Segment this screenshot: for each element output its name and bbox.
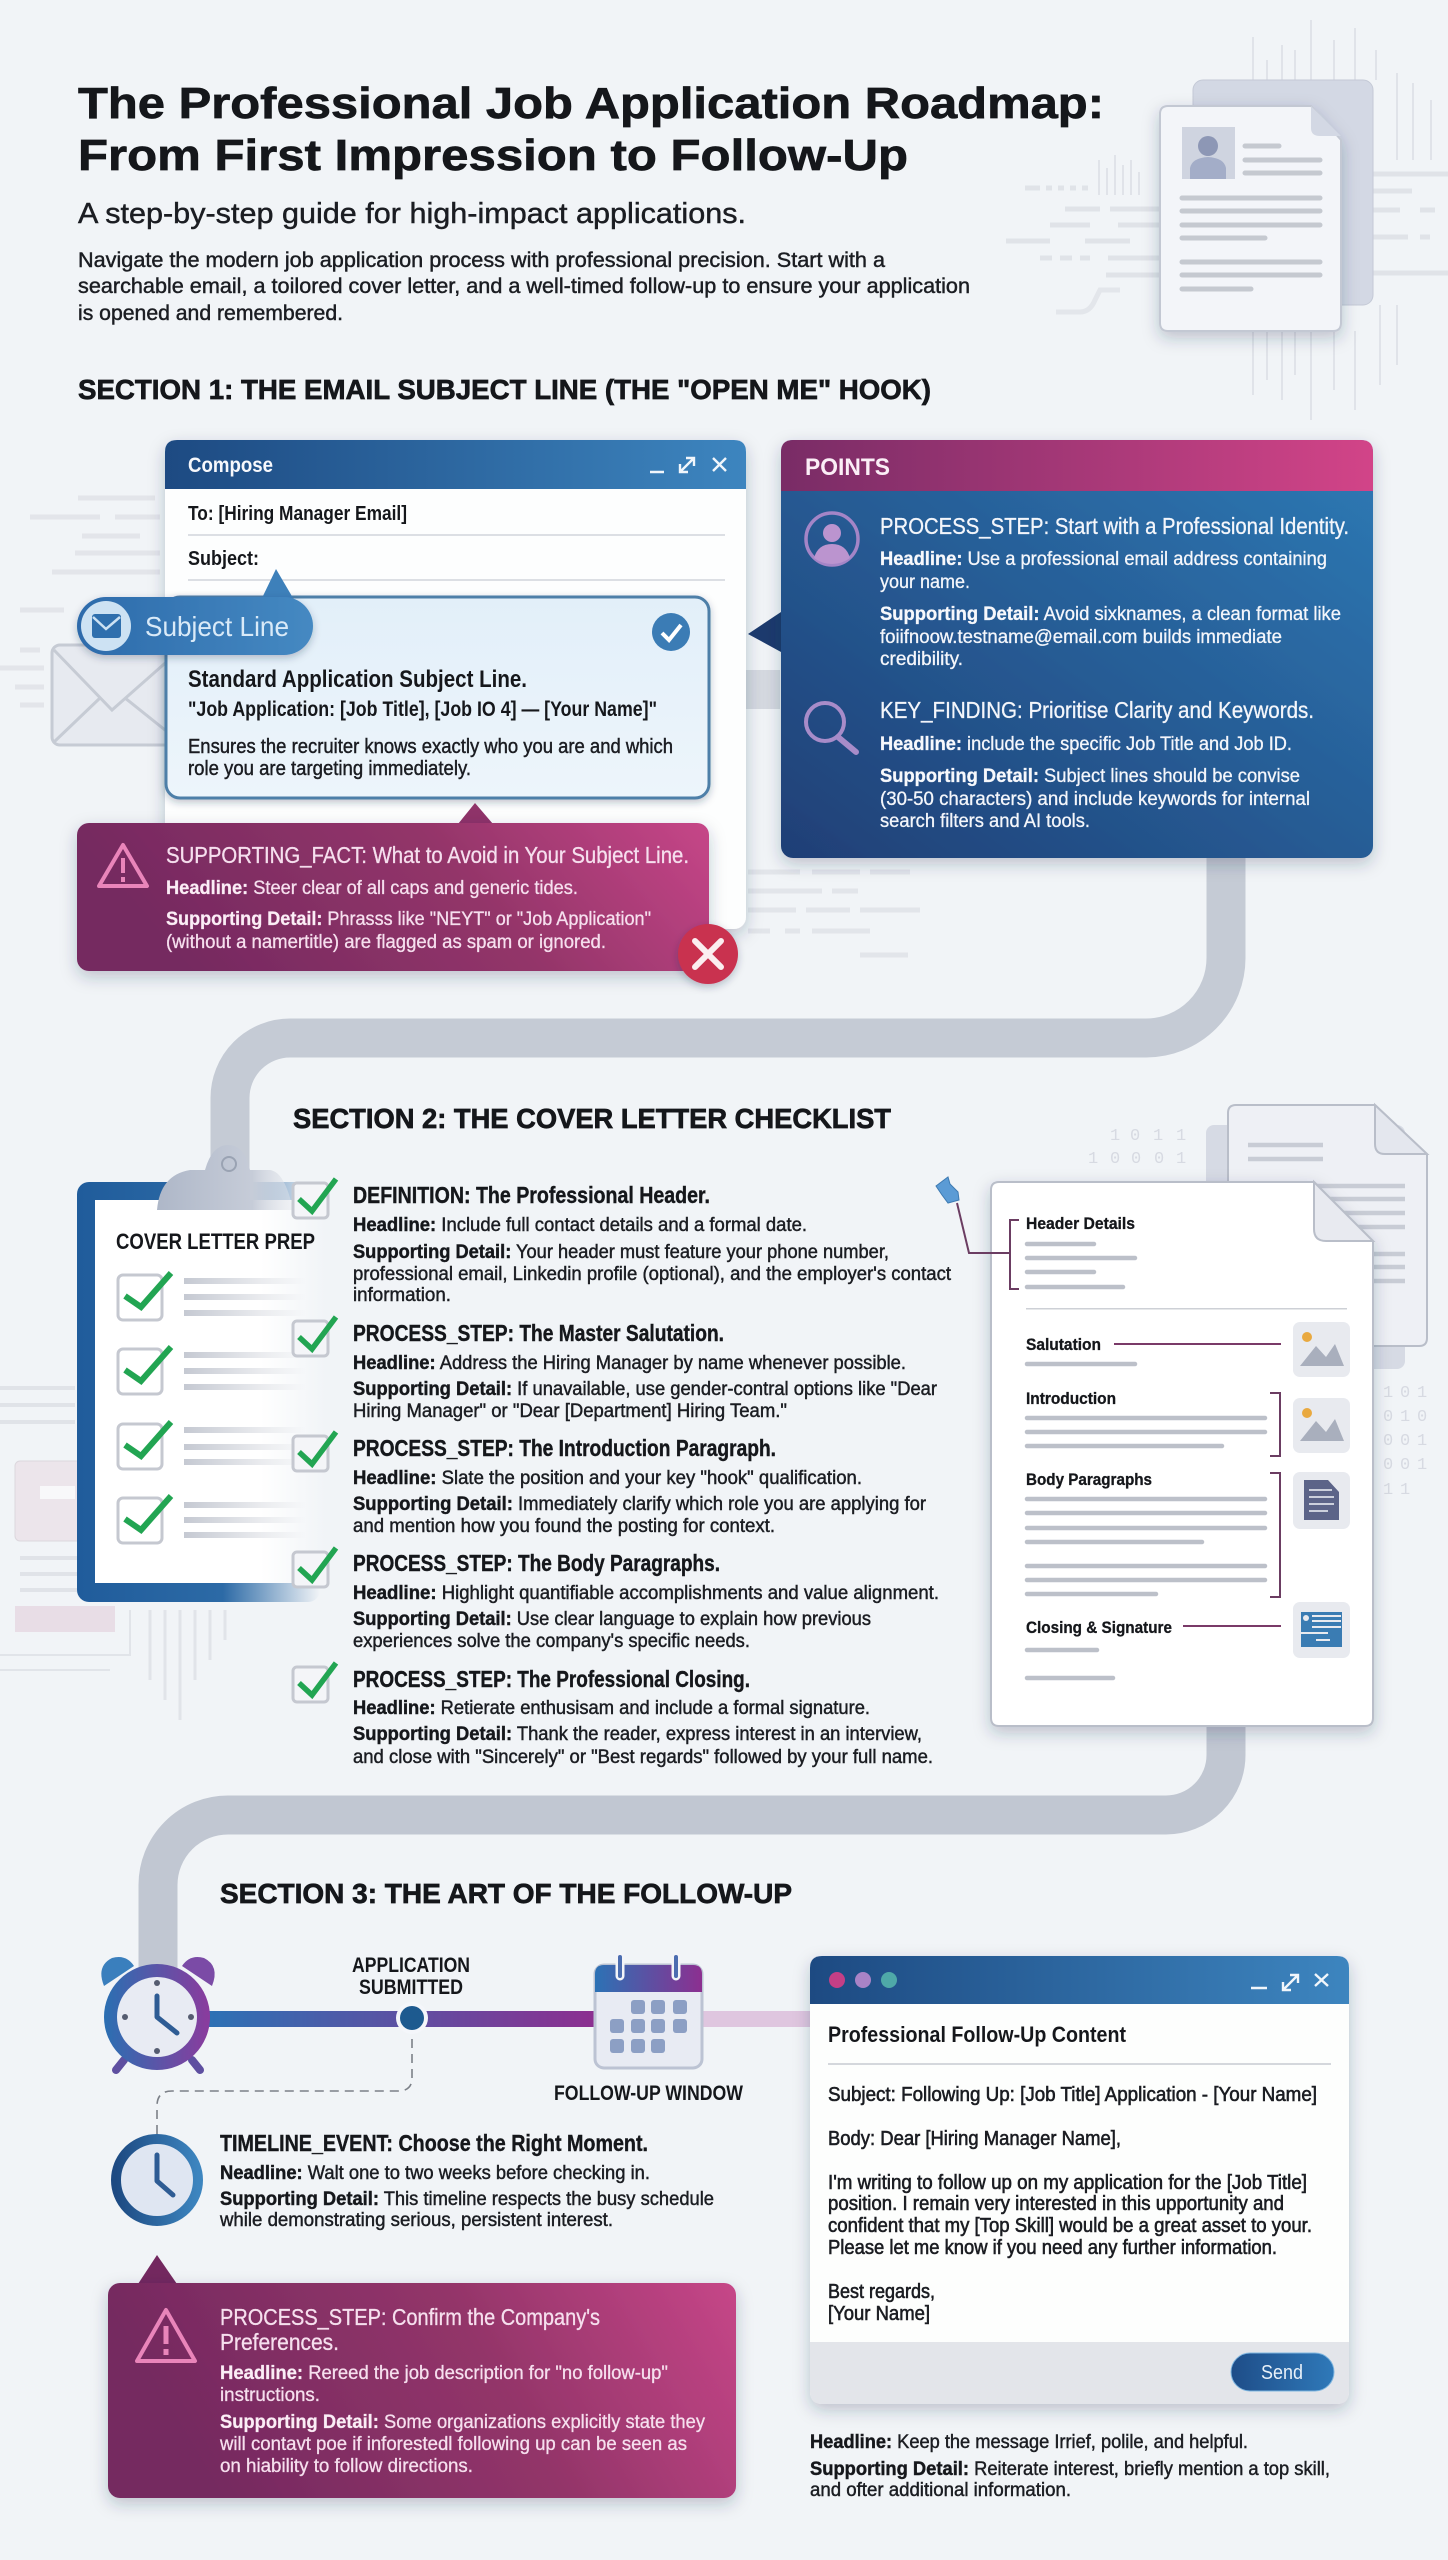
subject template: "Job Application: [Job Title], [Job IO 4] — [Your Name]" <box>188 698 657 721</box>
text block: email guidance: Headline: Keep the message Irrief, polile, and helpful. <box>810 2432 1248 2453</box>
decoration: binary digits: 0 <box>1110 1150 1120 1169</box>
checklist: introduction paragraph: and mention how you found the posting for context. <box>353 1516 775 1537</box>
email heading: Professional Follow-Up Content <box>828 2022 1127 2047</box>
decoration: binary digits: 0 <box>1417 1408 1427 1427</box>
checklist: body paragraphs: experiences solve the company's specific needs. <box>353 1631 750 1652</box>
avoid text <box>166 842 689 953</box>
text block: timeline event: TIMELINE_EVENT: Choose the Right Moment. <box>220 2130 648 2156</box>
icon: envelope <box>81 601 131 651</box>
icon: document tile <box>1293 1472 1350 1529</box>
points label: POINTS <box>805 454 890 481</box>
checklist: introduction paragraph: Headline: Slate the position and your key "hook" qualification. <box>353 1468 862 1489</box>
email sign-off <box>828 2281 935 2325</box>
checklist: body paragraphs: PROCESS_STEP: The Body Paragraphs. <box>353 1550 720 1576</box>
dashed connector <box>157 2039 412 2135</box>
label: follow-up window: FOLLOW-UP WINDOW <box>554 2082 743 2105</box>
heading: section 2: SECTION 2: THE COVER LETTER CHECKLIST <box>293 1103 891 1134</box>
checklist: professional closing: and close with "Sincerely" or "Best regards" followed by your full name. <box>353 1747 933 1768</box>
callout: subject line pill <box>77 569 313 655</box>
point: clarity and keywords: Headline: include the specific Job Title and Job ID. <box>880 734 1292 755</box>
email sign-off: [Your Name] <box>828 2303 930 2325</box>
points header <box>781 440 1373 491</box>
email body <box>828 2172 1312 2259</box>
clipboard clip <box>157 1145 293 1210</box>
timeline node: application submitted: APPLICATION <box>352 1954 470 1977</box>
checklist: professional header: Supporting Detail: Your header must feature your phone number, <box>353 1242 889 1263</box>
avoid text: Supporting Detail: Phrasss like "NEYT" or "Job Application" <box>166 909 651 930</box>
decoration: binary digits: 0 <box>1154 1150 1164 1169</box>
checklist: introduction paragraph: PROCESS_STEP: The Introduction Paragraph. <box>353 1435 776 1461</box>
window controls <box>1251 1974 1328 1990</box>
heading: section 1: SECTION 1: THE EMAIL SUBJECT LINE (THE "OPEN ME" HOOK) <box>78 374 931 405</box>
avoid text: Headline: Steer clear of all caps and generic tides. <box>166 878 578 899</box>
decoration: binary digits: 0 <box>1400 1384 1410 1403</box>
checklist: master salutation: Hiring Manager" or "Dear [Department] Hiring Team." <box>353 1401 787 1422</box>
card description: Ensures the recruiter knows exactly who you are and which <box>188 736 673 758</box>
window dots <box>829 1972 897 1988</box>
clipboard checklist item <box>118 1347 305 1394</box>
panel: annotated cover letter <box>936 1177 1373 1726</box>
checklist: master salutation: Headline: Address the Hiring Manager by name whenever possible. <box>353 1353 906 1374</box>
decoration: binary digits: 1 <box>1417 1456 1427 1475</box>
decoration: binary digits: 0 <box>1383 1456 1393 1475</box>
email body: position. I remain very interested in this upportunity and <box>828 2193 1284 2215</box>
text block: email guidance: Supporting Detail: Reiterate interest, briefly mention a top skill, <box>810 2459 1330 2480</box>
checklist: introduction paragraph <box>293 1432 927 1537</box>
decoration: binary digits: 1 <box>1383 1384 1393 1403</box>
card heading: Standard Application Subject Line. <box>188 666 527 693</box>
label: body paragraphs: Body Paragraphs <box>1026 1470 1152 1489</box>
email subject: Subject: Following Up: [Job Title] Application - [Your Name] <box>828 2084 1317 2106</box>
email footer bar <box>810 2342 1349 2404</box>
decoration: binary digits <box>1088 1127 1427 1500</box>
icon: user <box>806 513 858 565</box>
decoration: binary digits: 1 <box>1383 1481 1393 1500</box>
send button: Send <box>1261 2362 1303 2384</box>
callout: subject line pill: Subject Line <box>145 611 289 642</box>
point: professional identity: your name. <box>880 572 970 593</box>
send button <box>1231 2353 1334 2391</box>
decoration: binary digits: 0 <box>1400 1432 1410 1451</box>
email body: confident that my [Top Skill] would be a great asset to your. <box>828 2215 1312 2237</box>
point: clarity and keywords: KEY_FINDING: Prioritise Clarity and Keywords. <box>880 697 1314 723</box>
checklist: professional closing: Headline: Retierate enthusisam and include a formal signature. <box>353 1698 870 1719</box>
checklist: professional header: information. <box>353 1285 451 1306</box>
point: professional identity: Supporting Detail: Avoid sixknames, a clean format like <box>880 604 1341 625</box>
icon: calendar <box>595 1957 702 2068</box>
checklist: professional header: Headline: Include full contact details and a formal date. <box>353 1215 807 1236</box>
panel: what to avoid callout <box>77 803 709 971</box>
icon: small clock <box>116 2139 198 2221</box>
subject field: Subject: <box>188 548 259 570</box>
icon: magnifier <box>806 703 856 752</box>
checklist: introduction paragraph: Supporting Detail: Immediately clarify which role you are applying for <box>353 1494 927 1515</box>
checklist: professional header <box>293 1179 952 1306</box>
intro paragraph: Navigate the modern job application process with professional precision. Start with a <box>78 249 885 272</box>
compose title bar <box>165 440 746 489</box>
decoration: binary digits: 1 <box>1110 1127 1120 1146</box>
panel: points <box>748 440 1373 858</box>
icon: image tile <box>1293 1398 1350 1453</box>
checklist: body paragraphs <box>293 1548 939 1652</box>
icon: red X badge <box>678 924 738 984</box>
point: clarity and keywords: search filters and AI tools. <box>880 811 1090 832</box>
icon: warning triangle <box>137 2310 195 2361</box>
card description: role you are targeting immediately. <box>188 758 471 780</box>
panel: follow-up email window <box>810 1956 1349 2404</box>
clipboard title: COVER LETTER PREP <box>116 1229 315 1254</box>
text block: timeline event: Supporting Detail: This timeline respects the busy schedule <box>220 2189 714 2210</box>
panel: compose email window <box>165 440 746 929</box>
point: clarity and keywords: Supporting Detail: Subject lines should be convise <box>880 766 1300 787</box>
checklist: professional header: professional email, Linkedin profile (optional), and the employer's contact <box>353 1264 952 1285</box>
email body: Please let me know if you need any further information. <box>828 2237 1277 2259</box>
intro paragraph: searchable email, a toilored cover letter, and a well-timed follow-up to ensure your application <box>78 275 970 298</box>
icon: signature tile <box>1293 1602 1350 1658</box>
avoid text: (without a namertitle) are flagged as spam or ignored. <box>166 932 606 953</box>
annotation: header bracket <box>957 1203 1019 1289</box>
checklist: professional closing: PROCESS_STEP: The Professional Closing. <box>353 1666 750 1692</box>
callout text: will contavt poe if inforestedl following up can be seen as <box>219 2434 687 2455</box>
decoration: binary digits: 0 <box>1383 1432 1393 1451</box>
callout text <box>219 2304 705 2477</box>
timeline node: application submitted: SUBMITTED <box>359 1976 463 1999</box>
callout text: Preferences. <box>220 2329 339 2355</box>
point: professional identity: foiifnoow.testname@email.com builds immediate <box>880 627 1282 648</box>
icon: warning triangle <box>99 845 147 886</box>
icon: alarm clock <box>101 1957 215 2070</box>
email sign-off: Best regards, <box>828 2281 935 2303</box>
page fold <box>1314 1182 1373 1241</box>
icon: background envelope <box>52 645 182 745</box>
checklist: master salutation: Supporting Detail: If unavailable, use gender-contral options like "Dear <box>353 1379 938 1400</box>
callout text: on hiability to follow directions. <box>220 2456 473 2477</box>
label: closing and signature: Closing & Signature <box>1026 1618 1172 1637</box>
checklist: professional closing: Supporting Detail: Thank the reader, express interest in an interview, <box>353 1724 922 1745</box>
point: professional identity: PROCESS_STEP: Start with a Professional Identity. <box>880 513 1349 539</box>
panel: confirm preferences callout <box>108 2255 736 2498</box>
title: The Professional Job Application Roadmap: <box>78 79 1104 128</box>
icon: pin <box>936 1177 959 1203</box>
chart: follow-up timeline <box>101 1954 812 2135</box>
label: introduction: Introduction <box>1026 1389 1116 1408</box>
intro paragraph <box>78 249 970 325</box>
checklist: master salutation <box>293 1317 938 1422</box>
callout text: instructions. <box>220 2385 320 2406</box>
point: professional identity: Headline: Use a professional email address containing <box>880 549 1327 570</box>
decoration: binary digits: 1 <box>1417 1432 1427 1451</box>
checklist: body paragraphs: Supporting Detail: Use clear language to explain how previous <box>353 1609 871 1630</box>
card description <box>188 736 673 780</box>
checklist: professional header: DEFINITION: The Professional Header. <box>353 1182 710 1208</box>
decoration: binary digits: 1 <box>1088 1150 1098 1169</box>
decoration: binary digits: 0 <box>1130 1127 1140 1146</box>
text block: email guidance <box>810 2432 1330 2501</box>
point: professional identity: credibility. <box>880 649 963 670</box>
to field: To: [Hiring Manager Email] <box>188 503 407 525</box>
clipboard checklist item <box>118 1496 305 1543</box>
label: header details: Header Details <box>1026 1214 1135 1233</box>
callout text: Headline: Rereed the job description for "no follow-up" <box>220 2363 668 2384</box>
point: clarity and keywords: (30-50 characters) and include keywords for internal <box>880 789 1310 810</box>
compose label: Compose <box>188 454 273 477</box>
timeline bar <box>205 2011 595 2027</box>
text block: email guidance: and ofter additional information. <box>810 2480 1071 2501</box>
icon: resume document illustration <box>1160 80 1373 331</box>
timeline node: application submitted <box>352 1954 470 2034</box>
email greeting: Body: Dear [Hiring Manager Name], <box>828 2128 1121 2150</box>
callout text: PROCESS_STEP: Confirm the Company's <box>220 2304 600 2330</box>
decoration: binary digits: 1 <box>1176 1127 1186 1146</box>
checklist: master salutation: PROCESS_STEP: The Master Salutation. <box>353 1320 724 1346</box>
decoration: binary digits: 1 <box>1400 1481 1410 1500</box>
window controls <box>650 458 726 472</box>
decoration: binary digits: 1 <box>1417 1384 1427 1403</box>
subtitle: A step-by-step guide for high-impact applications. <box>78 198 746 230</box>
text block: timeline event: while demonstrating serious, persistent interest. <box>219 2210 613 2231</box>
icon: stacked background documents <box>1206 1105 1427 1369</box>
heading: section 3: SECTION 3: THE ART OF THE FOLLOW-UP <box>220 1878 792 1909</box>
roadmap connector: section 2 to section 3 <box>158 1720 1226 1975</box>
decoration: binary digits: 1 <box>1153 1127 1163 1146</box>
text block: timeline event <box>219 2130 714 2231</box>
title: From First Impression to Follow-Up <box>78 131 908 180</box>
decoration: binary digits: 1 <box>1176 1150 1186 1169</box>
title <box>78 79 1104 180</box>
email title bar <box>810 1956 1349 2004</box>
header text block <box>78 79 1104 325</box>
decoration: binary digits: 0 <box>1400 1456 1410 1475</box>
decoration: binary digits: 0 <box>1131 1150 1141 1169</box>
clipboard checklist item <box>118 1422 305 1469</box>
icon: image tile <box>1293 1322 1350 1377</box>
avoid text: SUPPORTING_FACT: What to Avoid in Your Subject Line. <box>166 842 689 868</box>
clipboard checklist item <box>118 1273 305 1320</box>
checklist: body paragraphs: Headline: Highlight quantifiable accomplishments and value alignment. <box>353 1583 939 1604</box>
panel: clipboard <box>77 1145 325 1602</box>
point: professional identity <box>880 513 1349 670</box>
text block: timeline event: Neadline: Walt one to two weeks before checking in. <box>220 2163 650 2184</box>
email body: I'm writing to follow up on my application for the [Job Title] <box>828 2172 1307 2194</box>
decoration: binary digits: 0 <box>1383 1408 1393 1427</box>
point: clarity and keywords <box>880 697 1314 832</box>
checklist: professional closing <box>293 1663 933 1768</box>
panel: subject line example card <box>166 597 709 798</box>
roadmap connector: section 1 to section 2 <box>230 850 1226 1175</box>
decoration: binary digits: 1 <box>1400 1408 1410 1427</box>
label: salutation: Salutation <box>1026 1335 1101 1354</box>
check badge <box>652 613 690 651</box>
callout text: Supporting Detail: Some organizations explicitly state they <box>220 2412 705 2433</box>
intro paragraph: is opened and remembered. <box>78 302 343 325</box>
